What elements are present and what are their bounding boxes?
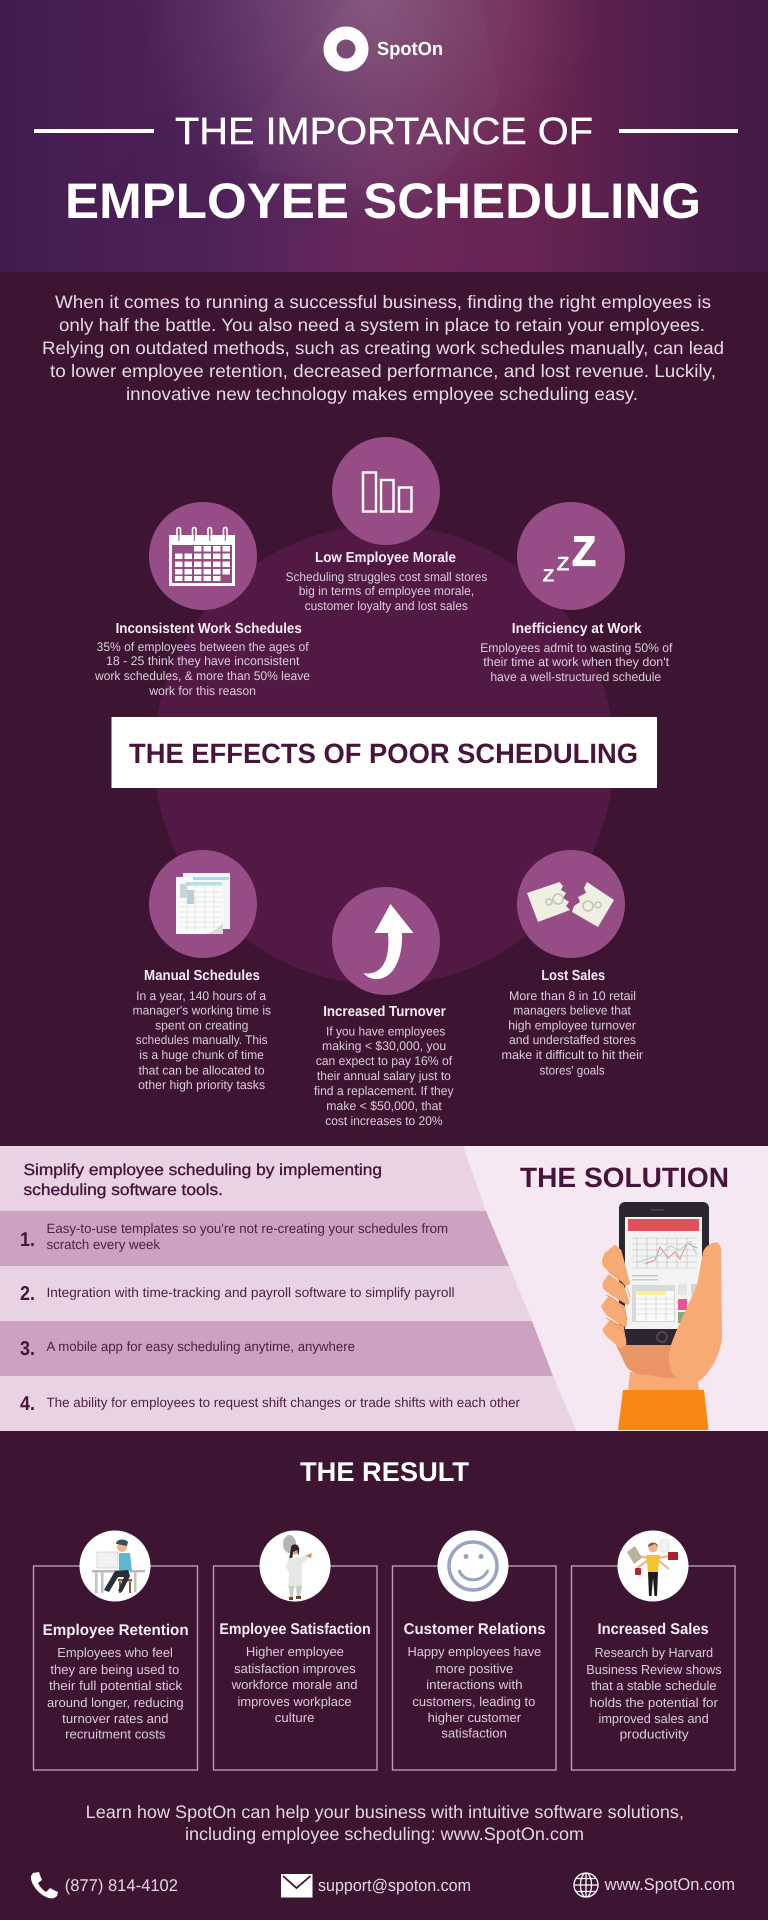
- contact: phone: [31, 1872, 178, 1898]
- contact: email: support@spoton.com: [318, 1876, 471, 1895]
- card body: higher customer: [428, 1710, 522, 1725]
- card body: customers, leading to: [412, 1694, 535, 1709]
- text: inconsistent work schedules: work schedules, & more than 50% leave: [94, 669, 310, 683]
- solution intro text: [24, 1162, 382, 1199]
- icon: person at desk: [80, 1530, 150, 1602]
- card title: Increased Sales: [598, 1621, 709, 1638]
- text: increased turnover: [314, 1004, 454, 1128]
- text: low employee morale: customer loyalty and lost sales: [305, 599, 468, 613]
- text: increased turnover: making < $30,000, you: [322, 1039, 446, 1053]
- text: manual schedules: that can be allocated to: [138, 1064, 265, 1078]
- card body: interactions with: [426, 1677, 523, 1692]
- intro paragraph: When it comes to running a successful business, finding the right employees is: [55, 292, 711, 312]
- text: lost sales: high employee turnover: [508, 1018, 636, 1032]
- text: inefficiency at work: Employees admit to wasting 50% of: [480, 641, 673, 655]
- text: inconsistent work schedules: 18 - 25 think they have inconsistent: [106, 654, 300, 668]
- card body: Employees who feel: [57, 1645, 173, 1660]
- panel: the solution: [0, 1146, 768, 1431]
- text: manual schedules: [133, 968, 271, 1092]
- text: lost sales: More than 8 in 10 retail: [509, 989, 636, 1003]
- text: manual schedules: schedules manually. This: [136, 1033, 268, 1047]
- icon: manual schedule sheets: [149, 850, 257, 958]
- card body: satisfaction improves: [234, 1661, 356, 1676]
- icon: zzz sleep: Z: [556, 554, 570, 576]
- card body: productivity: [620, 1726, 689, 1742]
- text: increased turnover: Increased Turnover: [323, 1004, 446, 1020]
- call to action text: Learn how SpotOn can help your business with intuitive software solutions,: [86, 1802, 684, 1822]
- solution intro text: scheduling software tools.: [24, 1182, 223, 1199]
- card body: holds the potential for: [590, 1695, 719, 1710]
- text: inconsistent work schedules: 35% of employees between the ages of: [97, 640, 309, 654]
- text: inconsistent work schedules: Inconsistent Work Schedules: [116, 621, 302, 637]
- text: manual schedules: other high priority tasks: [138, 1078, 265, 1092]
- contact: website: [574, 1873, 735, 1897]
- solution item 2: Integration with time-tracking and payroll software to simplify payroll: [46, 1285, 454, 1300]
- text: increased turnover: cost increases to 20%: [325, 1114, 443, 1128]
- intro paragraph: [42, 292, 724, 404]
- card body: improves workplace: [238, 1694, 352, 1709]
- solution item 1: scratch every week: [46, 1237, 160, 1252]
- text: manual schedules: In a year, 140 hours of a: [136, 989, 266, 1003]
- card body: their full potential stick: [49, 1678, 183, 1693]
- text: increased turnover: find a replacement. If they: [314, 1084, 454, 1098]
- card body: around longer, reducing: [47, 1695, 184, 1710]
- card body: culture: [275, 1710, 314, 1725]
- icon: chef: [260, 1530, 330, 1602]
- icon: low morale bars: [332, 437, 440, 545]
- icon: zzz sleep: Z: [542, 566, 554, 586]
- text: increased turnover: make < $50,000, that: [326, 1099, 442, 1113]
- solution item 3: A mobile app for easy scheduling anytime, anywhere: [46, 1339, 355, 1354]
- logo: SpotOn: SpotOn: [377, 39, 443, 60]
- card body: recruitment costs: [65, 1726, 166, 1742]
- text: inefficiency at work: Inefficiency at Work: [512, 621, 642, 637]
- text: low employee morale: Scheduling struggles cost small stores: [286, 570, 487, 584]
- text: low employee morale: big in terms of employee morale,: [299, 584, 474, 598]
- title: [34, 111, 738, 229]
- card title: Customer Relations: [404, 1621, 546, 1638]
- text: lost sales: managers believe that: [513, 1004, 631, 1018]
- card body: Business Review shows: [586, 1662, 722, 1677]
- card: customer relations: [392, 1530, 556, 1770]
- contact: phone: (877) 814-4102: [65, 1876, 178, 1895]
- solution item 4: 4.: [20, 1393, 35, 1415]
- icon: zzz sleep: Z: [572, 528, 596, 574]
- card body: [408, 1644, 541, 1740]
- text: increased turnover: can expect to pay 16% of: [316, 1054, 453, 1068]
- heading: the result: THE RESULT: [300, 1457, 470, 1487]
- card body: more positive: [435, 1661, 513, 1676]
- title: EMPLOYEE SCHEDULING: [65, 173, 701, 229]
- text: inconsistent work schedules: [94, 621, 310, 698]
- solution item 1: 1.: [20, 1229, 35, 1251]
- header banner: [0, 0, 768, 272]
- heading banner: the effects of poor scheduling: [112, 717, 657, 788]
- icon: calendar: [149, 502, 257, 610]
- intro paragraph: innovative new technology makes employee scheduling easy.: [126, 384, 638, 404]
- icon: torn money: [517, 850, 625, 958]
- card body: Happy employees have: [408, 1644, 541, 1659]
- solution item 3: 3.: [20, 1338, 35, 1360]
- icon: upward turnover arrow: [332, 887, 440, 995]
- solution item 2: [20, 1283, 454, 1305]
- text: lost sales: stores' goals: [540, 1064, 605, 1078]
- text: manual schedules: manager's working time is: [133, 1004, 271, 1018]
- solution item 1: [20, 1221, 448, 1252]
- text: increased turnover: If you have employees: [326, 1024, 445, 1038]
- text: increased turnover: their annual salary just to: [317, 1069, 451, 1083]
- card body: Research by Harvard: [595, 1645, 713, 1660]
- intro paragraph: to lower employee retention, decreased performance, and lost revenue. Luckily,: [50, 361, 716, 381]
- text: manual schedules: Manual Schedules: [144, 968, 260, 984]
- solution intro text: Simplify employee scheduling by implementing: [24, 1162, 382, 1179]
- text: lost sales: make it difficult to hit their: [502, 1048, 643, 1062]
- card body: that a stable schedule: [591, 1678, 717, 1693]
- card body: improved sales and: [598, 1711, 709, 1726]
- text: inefficiency at work: have a well-structured schedule: [490, 670, 661, 684]
- solution item 3: [20, 1338, 355, 1360]
- text: inconsistent work schedules: work for this reason: [148, 684, 256, 698]
- icon: smiley: [438, 1530, 508, 1602]
- solution item 4: The ability for employees to request shift changes or trade shifts with each other: [46, 1395, 520, 1410]
- contact: email: [281, 1874, 471, 1898]
- text: lost sales: [502, 968, 643, 1078]
- contact: website: www.SpotOn.com: [604, 1875, 735, 1894]
- card body: [231, 1644, 358, 1725]
- text: inefficiency at work: their time at work when they don't: [483, 655, 670, 669]
- text: low employee morale: Low Employee Morale: [315, 550, 456, 566]
- text: low employee morale: [286, 550, 487, 613]
- text: lost sales: Lost Sales: [541, 968, 605, 984]
- call to action text: [86, 1802, 684, 1844]
- card: employee satisfaction: [214, 1530, 377, 1770]
- solution item 2: 2.: [20, 1283, 35, 1305]
- card body: workforce morale and: [231, 1677, 358, 1692]
- heading banner: the effects of poor scheduling: THE EFFECTS OF POOR SCHEDULING: [129, 738, 638, 769]
- card body: they are being used to: [50, 1662, 179, 1677]
- card title: Employee Retention: [43, 1622, 189, 1639]
- solution item 4: [20, 1393, 520, 1415]
- card body: [586, 1645, 722, 1742]
- card body: Higher employee: [246, 1644, 344, 1659]
- card: increased sales: [572, 1530, 735, 1770]
- text: manual schedules: is a huge chunk of time: [139, 1048, 264, 1062]
- intro paragraph: Relying on outdated methods, such as creating work schedules manually, can lead: [42, 338, 724, 358]
- title: THE IMPORTANCE OF: [175, 111, 593, 153]
- call to action text: including employee scheduling: www.SpotOn.com: [185, 1824, 584, 1844]
- text: inefficiency at work: [480, 621, 673, 684]
- icon: multitasking person: [618, 1530, 688, 1602]
- card: employee retention: [34, 1530, 198, 1770]
- heading: the solution: THE SOLUTION: [520, 1162, 729, 1193]
- card title: Employee Satisfaction: [219, 1621, 371, 1638]
- text: lost sales: and understaffed stores: [509, 1033, 636, 1047]
- card body: turnover rates and: [62, 1711, 169, 1726]
- icon: zzz sleep: [517, 502, 625, 610]
- card body: satisfaction: [441, 1726, 507, 1740]
- intro paragraph: only half the battle. You also need a system in place to retain your employees.: [59, 315, 705, 335]
- logo: SpotOn: [330, 33, 443, 65]
- solution item 1: Easy-to-use templates so you're not re-creating your schedules from: [46, 1221, 448, 1236]
- text: manual schedules: spent on creating: [155, 1018, 248, 1032]
- card body: [47, 1645, 184, 1742]
- panel: effects of poor scheduling: [94, 437, 673, 1128]
- icon: hand holding phone: [602, 1202, 722, 1430]
